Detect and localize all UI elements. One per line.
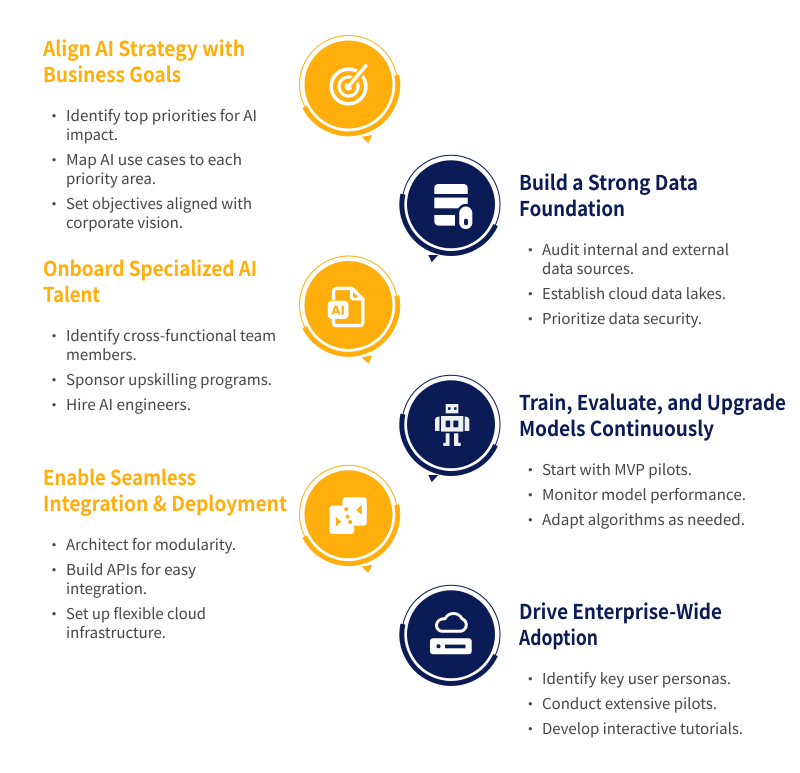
bullet list: strong data foundation: Prioritize data security.	[542, 308, 702, 329]
bullet list: enterprise-wide adoption: Conduct extensive pilots.	[542, 693, 717, 714]
heading: integration and deployment: Integration & Deployment	[43, 487, 287, 517]
badge: dice icon	[300, 465, 398, 573]
bullet list: train evaluate upgrade: Adapt algorithms as needed.	[542, 509, 745, 530]
heading: strong data foundation: Foundation	[519, 192, 625, 222]
heading: integration and deployment	[43, 461, 287, 517]
heading: enterprise-wide adoption: Adoption	[518, 621, 598, 651]
bullet list: integration and deployment: infrastructure.	[66, 622, 166, 643]
bullet list: strong data foundation: Establish cloud data lakes.	[542, 283, 726, 304]
panel: specialized AI talent	[43, 252, 276, 415]
bullet list: align AI strategy: impact.	[66, 124, 118, 145]
bullet list: enterprise-wide adoption: Develop interactive tutorials.	[542, 718, 743, 739]
badge: target icon	[300, 36, 398, 143]
heading: enterprise-wide adoption: Drive Enterprise-Wide	[519, 595, 722, 625]
heading: train evaluate upgrade: Models Continuously	[519, 412, 714, 442]
badge: cloud server icon	[402, 585, 500, 683]
heading: integration and deployment: Enable Seamless	[43, 461, 196, 491]
bullet list: specialized AI talent: Sponsor upskilling programs.	[66, 369, 272, 390]
bullet list: integration and deployment: Set up flexible cloud	[66, 603, 206, 624]
heading: enterprise-wide adoption	[518, 595, 722, 651]
bullet list: align AI strategy: Map AI use cases to each	[66, 149, 242, 170]
bullet list: specialized AI talent: members.	[66, 344, 137, 365]
bullet list: align AI strategy	[52, 105, 257, 233]
panel: strong data foundation	[519, 166, 729, 329]
bullet list: specialized AI talent	[52, 325, 276, 415]
badge: robot icon	[402, 375, 500, 482]
bullet list: align AI strategy: corporate vision.	[66, 212, 183, 233]
bullet list: integration and deployment	[52, 534, 236, 643]
bullet list: enterprise-wide adoption	[529, 668, 743, 739]
icon: target with arrow	[331, 64, 368, 104]
bullet list: train evaluate upgrade: Start with MVP pilots.	[542, 459, 692, 480]
bullet list: strong data foundation: data sources.	[542, 258, 634, 279]
heading: specialized AI talent: Onboard Specialized AI	[43, 252, 257, 282]
heading: align AI strategy	[42, 32, 245, 88]
panel: integration and deployment	[43, 461, 287, 643]
heading: align AI strategy: Align AI Strategy with	[42, 32, 245, 62]
icon: database with lock	[434, 184, 474, 230]
bullet list: align AI strategy: priority area.	[66, 168, 156, 189]
icon: AI document: AI	[331, 304, 345, 318]
icon: robot	[435, 404, 469, 446]
heading: specialized AI talent: Talent	[43, 278, 100, 308]
heading: train evaluate upgrade	[519, 386, 786, 442]
heading: align AI strategy: Business Goals	[43, 58, 181, 88]
panel: align AI strategy	[42, 32, 257, 233]
bullet list: specialized AI talent: Identify cross-functional team	[66, 325, 276, 346]
bullet list: integration and deployment: integration.	[66, 578, 147, 599]
panel: train evaluate upgrade	[519, 386, 786, 530]
bullet list: train evaluate upgrade: Monitor model performance.	[542, 484, 746, 505]
bullet list: enterprise-wide adoption: Identify key user personas.	[542, 668, 731, 689]
icon: linked modules	[330, 497, 367, 534]
heading: strong data foundation: Build a Strong Data	[519, 166, 698, 196]
bullet list: align AI strategy: Set objectives aligned with	[66, 193, 252, 214]
panel: enterprise-wide adoption	[518, 595, 743, 739]
bullet list: strong data foundation	[529, 239, 729, 329]
bullet list: integration and deployment: Architect for modularity.	[66, 534, 236, 555]
icon: cloud and server	[430, 613, 472, 654]
heading: specialized AI talent	[43, 252, 257, 308]
bullet list: train evaluate upgrade	[529, 459, 746, 530]
badge: AI file icon	[300, 256, 398, 364]
bullet list: strong data foundation: Audit internal and external	[542, 239, 729, 260]
bullet list: align AI strategy: Identify top priorities for AI	[66, 105, 257, 126]
heading: strong data foundation	[519, 166, 698, 222]
bullet list: specialized AI talent: Hire AI engineers.	[66, 394, 191, 415]
badge: database icon	[402, 155, 500, 262]
bullet list: integration and deployment: Build APIs for easy	[66, 559, 196, 580]
